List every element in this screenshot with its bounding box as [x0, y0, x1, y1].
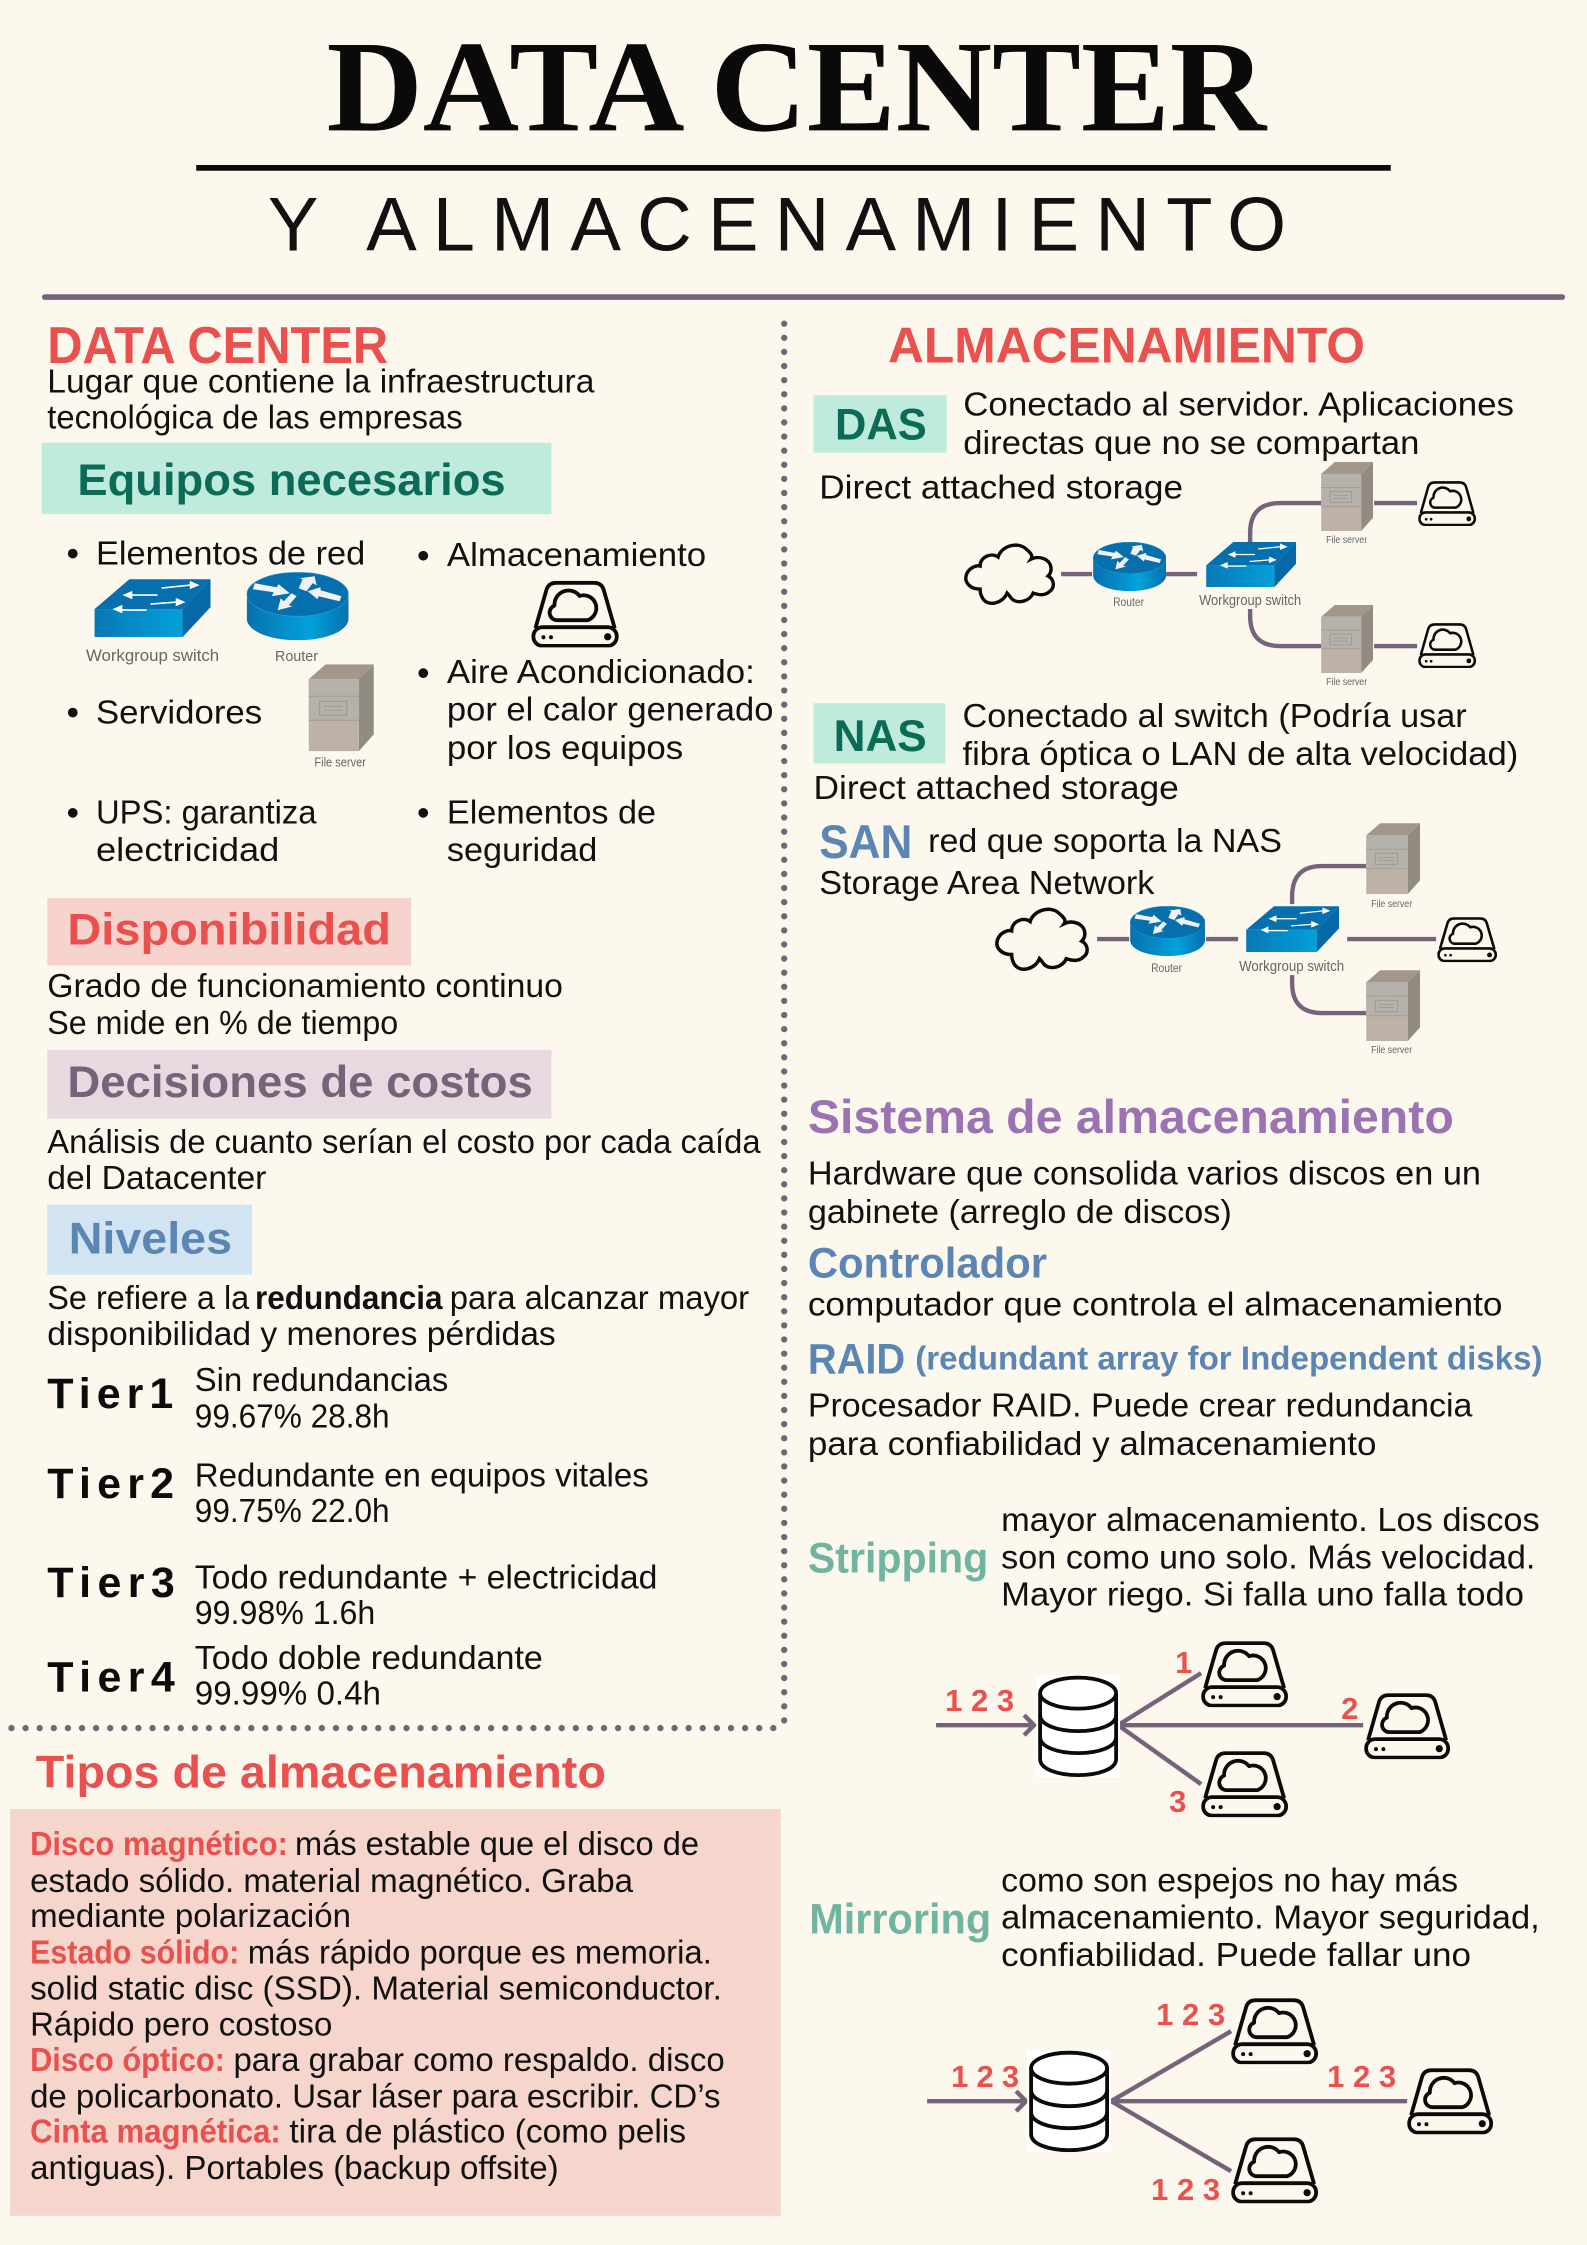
- panel: raid: RAID: [808, 1336, 905, 1384]
- panel: niveles: para alcanzar mayor: [450, 1280, 749, 1317]
- icon: router: Router: [1113, 597, 1144, 609]
- item: aire acondicionado: [418, 654, 773, 767]
- panel: nas: Conectado al switch (Podría usar: [963, 698, 1467, 735]
- panel: stripping: mayor almacenamiento. Los discos: [1001, 1502, 1540, 1539]
- panel: tipos de almacenamiento: tira de plástico (como pelis: [289, 2114, 686, 2151]
- tier 2: [47, 1458, 649, 1530]
- panel: das: Direct attached storage: [819, 469, 1183, 506]
- panel: stripping: son como uno solo. Más velocidad.: [1001, 1539, 1535, 1576]
- tier 4: Todo doble redundante: [195, 1640, 543, 1677]
- panel: mirroring: confiabilidad. Puede fallar uno: [1001, 1937, 1471, 1974]
- labels: data blocks: 1 2 3: [1327, 2059, 1396, 2094]
- icon: storage drive: [533, 583, 617, 646]
- heading: equipos necesarios: [42, 443, 551, 514]
- item: elementos de seguridad: seguridad: [447, 832, 597, 869]
- labels: data blocks: 2: [1341, 1691, 1358, 1726]
- icon: cloud: [966, 545, 1053, 603]
- icon: file server: [309, 664, 374, 769]
- icon: router: [1130, 906, 1205, 975]
- panel: tipos de almacenamiento: de policarbonato. Usar láser para escribir. CD’s: [30, 2079, 720, 2116]
- item: elementos de seguridad: [418, 795, 656, 869]
- labels: data blocks: [951, 1997, 1396, 2207]
- panel: controlador: Controlador: [808, 1240, 1047, 1288]
- icon: drive 3: [1203, 1753, 1286, 1816]
- icon: workgroup switch: Workgroup switch: [1239, 959, 1344, 975]
- icon: drive 2: [1409, 2070, 1491, 2133]
- panel: das: Conectado al servidor. Aplicaciones: [963, 386, 1514, 423]
- panel: stripping: [808, 1502, 1540, 1614]
- panel: sistema de almacenamiento: Hardware que consolida varios discos en un: [808, 1156, 1481, 1193]
- panel: tipos de almacenamiento: Rápido pero costoso: [30, 2006, 332, 2043]
- panel: mirroring: [809, 1862, 1540, 1974]
- panel: sistema de almacenamiento: [808, 1091, 1481, 1231]
- icon: disk array: [1036, 1675, 1120, 1777]
- icon: workgroup switch: [1239, 906, 1344, 975]
- panel: tipos de almacenamiento: [10, 1809, 781, 2216]
- item: ups: [68, 795, 317, 869]
- icon: router: Router: [1151, 963, 1182, 975]
- panel: niveles: [47, 1205, 749, 1353]
- icon: file server bottom: [1366, 970, 1420, 1056]
- lines: distribution: [1111, 2031, 1407, 2171]
- icon: file server top: [1321, 462, 1373, 546]
- icon: workgroup switch: Workgroup switch: [1199, 593, 1301, 609]
- tier 4: [47, 1640, 543, 1712]
- panel: tipos de almacenamiento: más rápido porque es memoria.: [248, 1935, 712, 1972]
- panel: niveles: redundancia: [255, 1280, 443, 1317]
- lines: distribution: [1118, 1673, 1363, 1784]
- tier 1: 99.67% 28.8h: [195, 1398, 390, 1435]
- panel: raid: (redundant array for Independent disks): [915, 1339, 1543, 1376]
- panel: san: red que soporta la NAS: [928, 823, 1282, 860]
- panel: raid: para confiabilidad y almacenamiento: [808, 1426, 1376, 1463]
- icon: workgroup switch: Workgroup switch: [86, 647, 219, 665]
- panel: tipos de almacenamiento: mediante polarización: [30, 1898, 351, 1935]
- panel: decisiones de costos: Decisiones de costos: [67, 1058, 533, 1107]
- tier 2: Redundante en equipos vitales: [195, 1458, 649, 1495]
- panel: data center intro: tecnológica de las empresas: [47, 399, 463, 436]
- tier 1: Sin redundancias: [195, 1362, 448, 1399]
- panel: stripping: Stripping: [808, 1535, 988, 1583]
- panel: raid: [808, 1336, 1543, 1463]
- panel: tipos de almacenamiento: Disco óptico:: [30, 2042, 225, 2079]
- arrow: input: [936, 1715, 1034, 1735]
- panel: decisiones de costos: del Datacenter: [47, 1160, 266, 1197]
- vertical dotted divider: [782, 324, 786, 1726]
- title: [196, 15, 1391, 268]
- panel: decisiones de costos: Análisis de cuanto serían el costo por cada caída: [47, 1124, 761, 1161]
- item: ups: UPS: garantiza: [96, 795, 317, 832]
- panel: niveles: disponibilidad y menores pérdidas: [47, 1316, 556, 1353]
- icon: file server bottom: [1321, 605, 1373, 688]
- item: servidores: Servidores: [96, 694, 262, 731]
- panel: decisiones de costos: [47, 1050, 761, 1197]
- heading: tipos de almacenamiento: Tipos de almacenamiento: [36, 1747, 606, 1798]
- labels: data blocks: [945, 1645, 1358, 1819]
- title: DATA CENTER: [327, 15, 1268, 159]
- tier 2: Tier2: [47, 1460, 174, 1508]
- labels: data blocks: 3: [1169, 1784, 1186, 1819]
- panel: disponibilidad: [47, 898, 563, 1042]
- panel: controlador: computador que controla el almacenamiento: [808, 1287, 1502, 1324]
- panel: data center intro: Lugar que contiene la infraestructura: [47, 363, 595, 400]
- icon: cloud: [997, 909, 1087, 969]
- panel: san: [819, 816, 1282, 902]
- icon: file server top: [1366, 823, 1420, 910]
- panel: tipos de almacenamiento: para grabar como respaldo. disco: [233, 2042, 725, 2079]
- arrow: input: [927, 2091, 1026, 2111]
- panel: stripping: Mayor riego. Si falla uno falla todo: [1001, 1577, 1524, 1614]
- panel: tipos de almacenamiento: solid static disc (SSD). Material semiconductor.: [30, 1970, 722, 2007]
- item: elementos de red: Elementos de red: [96, 535, 365, 572]
- tier 4: 99.99% 0.4h: [195, 1675, 381, 1712]
- icon: drive 3: [1233, 2139, 1316, 2202]
- panel: sistema de almacenamiento: Sistema de almacenamiento: [808, 1091, 1454, 1144]
- diagram: san network: [997, 823, 1496, 1056]
- panel: tipos de almacenamiento: estado sólido. material magnético. Graba: [30, 1863, 633, 1900]
- panel: nas: fibra óptica o LAN de alta velocidad): [963, 736, 1518, 773]
- tier 2: 99.75% 22.0h: [195, 1493, 390, 1530]
- icon: drive 2: [1366, 1695, 1448, 1758]
- tier 3: Tier3: [47, 1559, 175, 1607]
- icon: workgroup switch: [1199, 542, 1301, 609]
- panel: disponibilidad: Se mide en % de tiempo: [47, 1005, 398, 1042]
- panel: niveles: Se refiere a la: [47, 1280, 250, 1317]
- icon: drive 1: [1203, 1643, 1286, 1706]
- labels: data blocks: 1 2 3: [1156, 1997, 1225, 2032]
- tier 3: Todo redundante + electricidad: [195, 1560, 657, 1597]
- icon: drive: [1439, 918, 1496, 961]
- panel: disponibilidad: Disponibilidad: [67, 906, 391, 955]
- panel: controlador: [808, 1240, 1502, 1324]
- panel: san: SAN: [819, 816, 912, 869]
- icon: file server bottom: File server: [1371, 1044, 1413, 1056]
- panel: raid: Procesador RAID. Puede crear redundancia: [808, 1388, 1473, 1425]
- panel: nas: Direct attached storage: [814, 770, 1179, 807]
- panel: mirroring: Mirroring: [809, 1896, 991, 1944]
- panel: data center intro: DATA CENTER: [47, 316, 388, 374]
- icon: file server top: File server: [1371, 898, 1413, 910]
- panel: das: directas que no se compartan: [963, 425, 1419, 462]
- panel: niveles: Niveles: [69, 1214, 232, 1263]
- labels: data blocks: 1: [1175, 1645, 1192, 1680]
- icon: drive 1: [1233, 2000, 1316, 2063]
- panel: data center intro: [47, 316, 595, 436]
- icon: disk array: [1027, 2050, 1111, 2152]
- item: almacenamiento: Almacenamiento: [447, 537, 706, 574]
- icon: drive bottom: [1419, 624, 1475, 667]
- panel: tipos de almacenamiento: Estado sólido:: [30, 1935, 239, 1972]
- tier 3: 99.98% 1.6h: [195, 1595, 375, 1632]
- icon: drive top: [1419, 482, 1475, 525]
- panel: tipos de almacenamiento: Disco magnético:: [30, 1826, 288, 1863]
- item: ups: electricidad: [96, 832, 279, 869]
- panel: das: DAS: [835, 401, 927, 450]
- panel: nas: NAS: [834, 712, 927, 761]
- panel: mirroring: como son espejos no hay más: [1001, 1862, 1458, 1899]
- icon: router: [1093, 542, 1166, 609]
- diagram: das network: [966, 462, 1475, 688]
- diagram: stripping: [936, 1643, 1448, 1819]
- panel: disponibilidad: Grado de funcionamiento continuo: [47, 968, 563, 1005]
- title: Y ALMACENAMIENTO: [268, 183, 1286, 268]
- heading: equipos necesarios: Equipos necesarios: [77, 456, 506, 505]
- item: aire acondicionado: por el calor generado: [447, 691, 773, 728]
- icon: router: Router: [275, 649, 318, 665]
- labels: data blocks: 1 2 3: [945, 1683, 1014, 1718]
- icon: file server bottom: File server: [1326, 676, 1368, 688]
- panel: tipos de almacenamiento: más estable que el disco de: [295, 1826, 699, 1863]
- panel: san: Storage Area Network: [819, 865, 1155, 902]
- labels: data blocks: 1 2 3: [1151, 2172, 1220, 2207]
- horizontal dotted divider: [11, 1726, 785, 1730]
- header divider: [42, 294, 1565, 300]
- panel: tipos de almacenamiento: Cinta magnética:: [30, 2114, 281, 2151]
- icon: router: [247, 572, 348, 665]
- item: aire acondicionado: Aire Acondicionado:: [447, 654, 755, 691]
- icon: workgroup switch: [86, 579, 219, 665]
- labels: data blocks: 1 2 3: [951, 2059, 1019, 2094]
- tier 4: Tier4: [47, 1654, 175, 1702]
- diagram: mirroring: [927, 1997, 1491, 2207]
- tier 3: [47, 1559, 657, 1632]
- panel: nas: [814, 698, 1518, 807]
- tier 1: [47, 1362, 448, 1435]
- heading: almacenamiento: ALMACENAMIENTO: [888, 317, 1365, 373]
- item: elementos de seguridad: Elementos de: [447, 795, 656, 832]
- panel: tipos de almacenamiento: antiguas). Portables (backup offsite): [30, 2150, 559, 2187]
- tier 1: Tier1: [47, 1370, 173, 1418]
- panel: mirroring: almacenamiento. Mayor seguridad,: [1001, 1900, 1540, 1937]
- panel: equipos necesarios: [42, 443, 773, 869]
- panel: das: [814, 386, 1514, 506]
- icon: file server: File server: [314, 754, 367, 769]
- item: aire acondicionado: por los equipos: [447, 730, 683, 767]
- panel: sistema de almacenamiento: gabinete (arreglo de discos): [808, 1194, 1232, 1231]
- icon: file server top: File server: [1326, 534, 1368, 546]
